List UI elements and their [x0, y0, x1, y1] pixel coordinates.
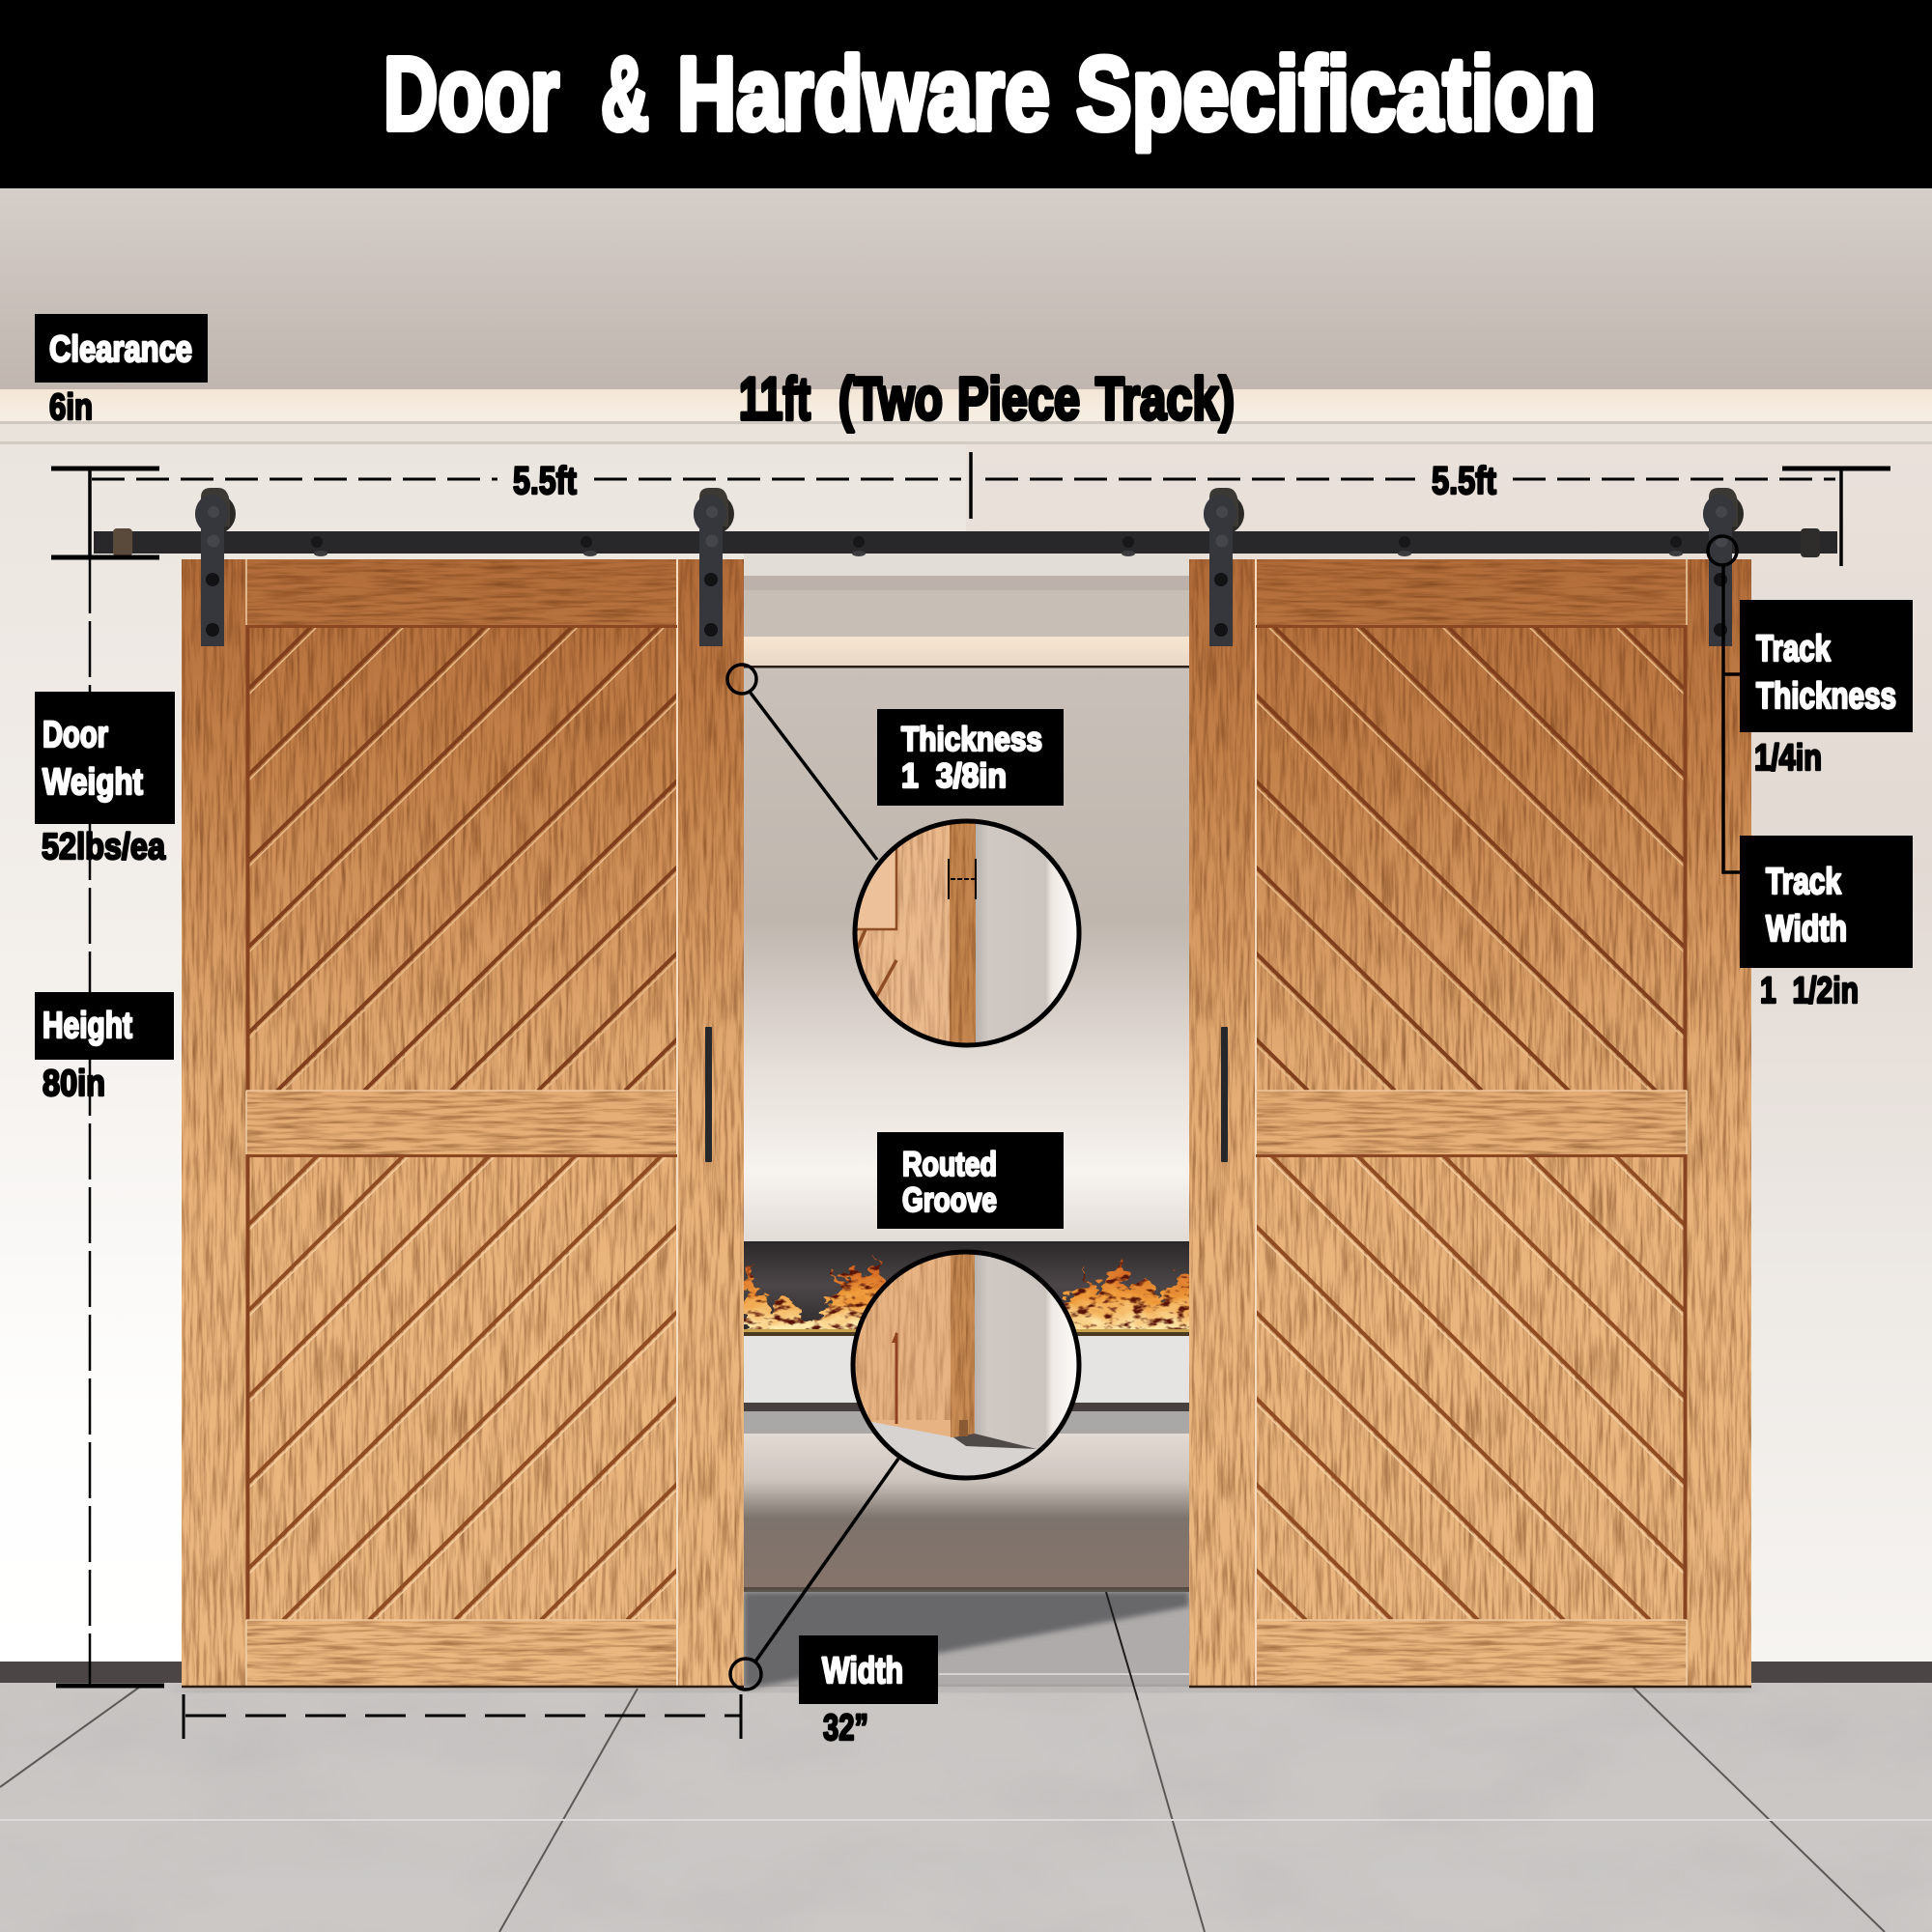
callout: height: [35, 992, 174, 1104]
door shadows on floor: [182, 1686, 1751, 1691]
callout: routed groove: Groove: [902, 1181, 997, 1219]
callout: routed groove: Routed: [902, 1146, 997, 1183]
doorway opening: back room: [744, 554, 1203, 1700]
track length heading: 11ft: [739, 366, 810, 433]
callout: track thickness: 1/4in: [1754, 738, 1822, 779]
callout: clearance: 6in: [49, 387, 93, 428]
dimension: door width: [184, 1694, 741, 1739]
right door: [835, 559, 1932, 1687]
label: 5.5ft right: 5.5ft: [1432, 460, 1496, 502]
track rail: [94, 528, 1837, 557]
thickness leader: [727, 665, 877, 860]
callout: routed groove: [877, 1132, 1064, 1229]
callout: track thickness: [1740, 600, 1913, 779]
callout: track width: Width: [1766, 909, 1847, 950]
title: Hardware: [677, 35, 1050, 152]
magnifier: door thickness: [850, 816, 1082, 1048]
callout: height: Height: [43, 1006, 132, 1046]
callout: track width: [1740, 836, 1913, 1011]
track length heading: Track): [1095, 366, 1235, 433]
track leader: [1708, 536, 1740, 872]
title: Specification: [1076, 35, 1596, 152]
callout: track thickness: Thickness: [1756, 676, 1896, 717]
callout: track width: 1 1/2in: [1760, 971, 1859, 1011]
hanger 1: [195, 488, 236, 646]
title: [384, 35, 1596, 152]
callout: track width: Track: [1766, 862, 1842, 902]
left door: [0, 559, 1098, 1687]
dimension: door height: [56, 557, 164, 1686]
hanger 2: [694, 488, 734, 646]
background: ceiling and wall: [0, 188, 1932, 1684]
track length heading: [739, 366, 1235, 433]
callout: clearance: [35, 314, 208, 428]
callout: door weight: [35, 692, 175, 867]
callout: thickness: Thickness: [901, 721, 1042, 758]
floor tiles: [0, 1683, 1932, 1932]
title: &: [601, 35, 649, 152]
right door handle: [1221, 1027, 1228, 1162]
callout: thickness: 1 3/8in: [901, 757, 1007, 795]
callout: width: [799, 1635, 938, 1748]
hanger 3: [1204, 488, 1244, 646]
label: 5.5ft left: 5.5ft: [513, 460, 577, 502]
header bar: [0, 0, 1932, 188]
title: Door: [384, 35, 559, 152]
magnifier: routed groove: [850, 1251, 1082, 1483]
callout: clearance: Clearance: [49, 329, 192, 370]
callout: track thickness: Track: [1756, 629, 1832, 669]
callout: thickness: [877, 709, 1064, 806]
callout: door weight: 52lbs/ea: [42, 827, 166, 867]
hanger 4: [1703, 488, 1744, 646]
left door handle: [705, 1027, 712, 1162]
track length heading: Piece: [957, 366, 1080, 433]
dimension: track span: [51, 452, 1890, 566]
width leader: [730, 1459, 898, 1690]
callout: width: Width: [822, 1651, 903, 1691]
track length heading: (Two: [838, 366, 943, 433]
fireplace flames: [744, 1256, 1203, 1337]
callout: door weight: Door: [43, 715, 108, 755]
callout: height: 80in: [43, 1064, 105, 1104]
callout: door weight: Weight: [43, 762, 143, 803]
callout: width: 32”: [823, 1708, 868, 1748]
